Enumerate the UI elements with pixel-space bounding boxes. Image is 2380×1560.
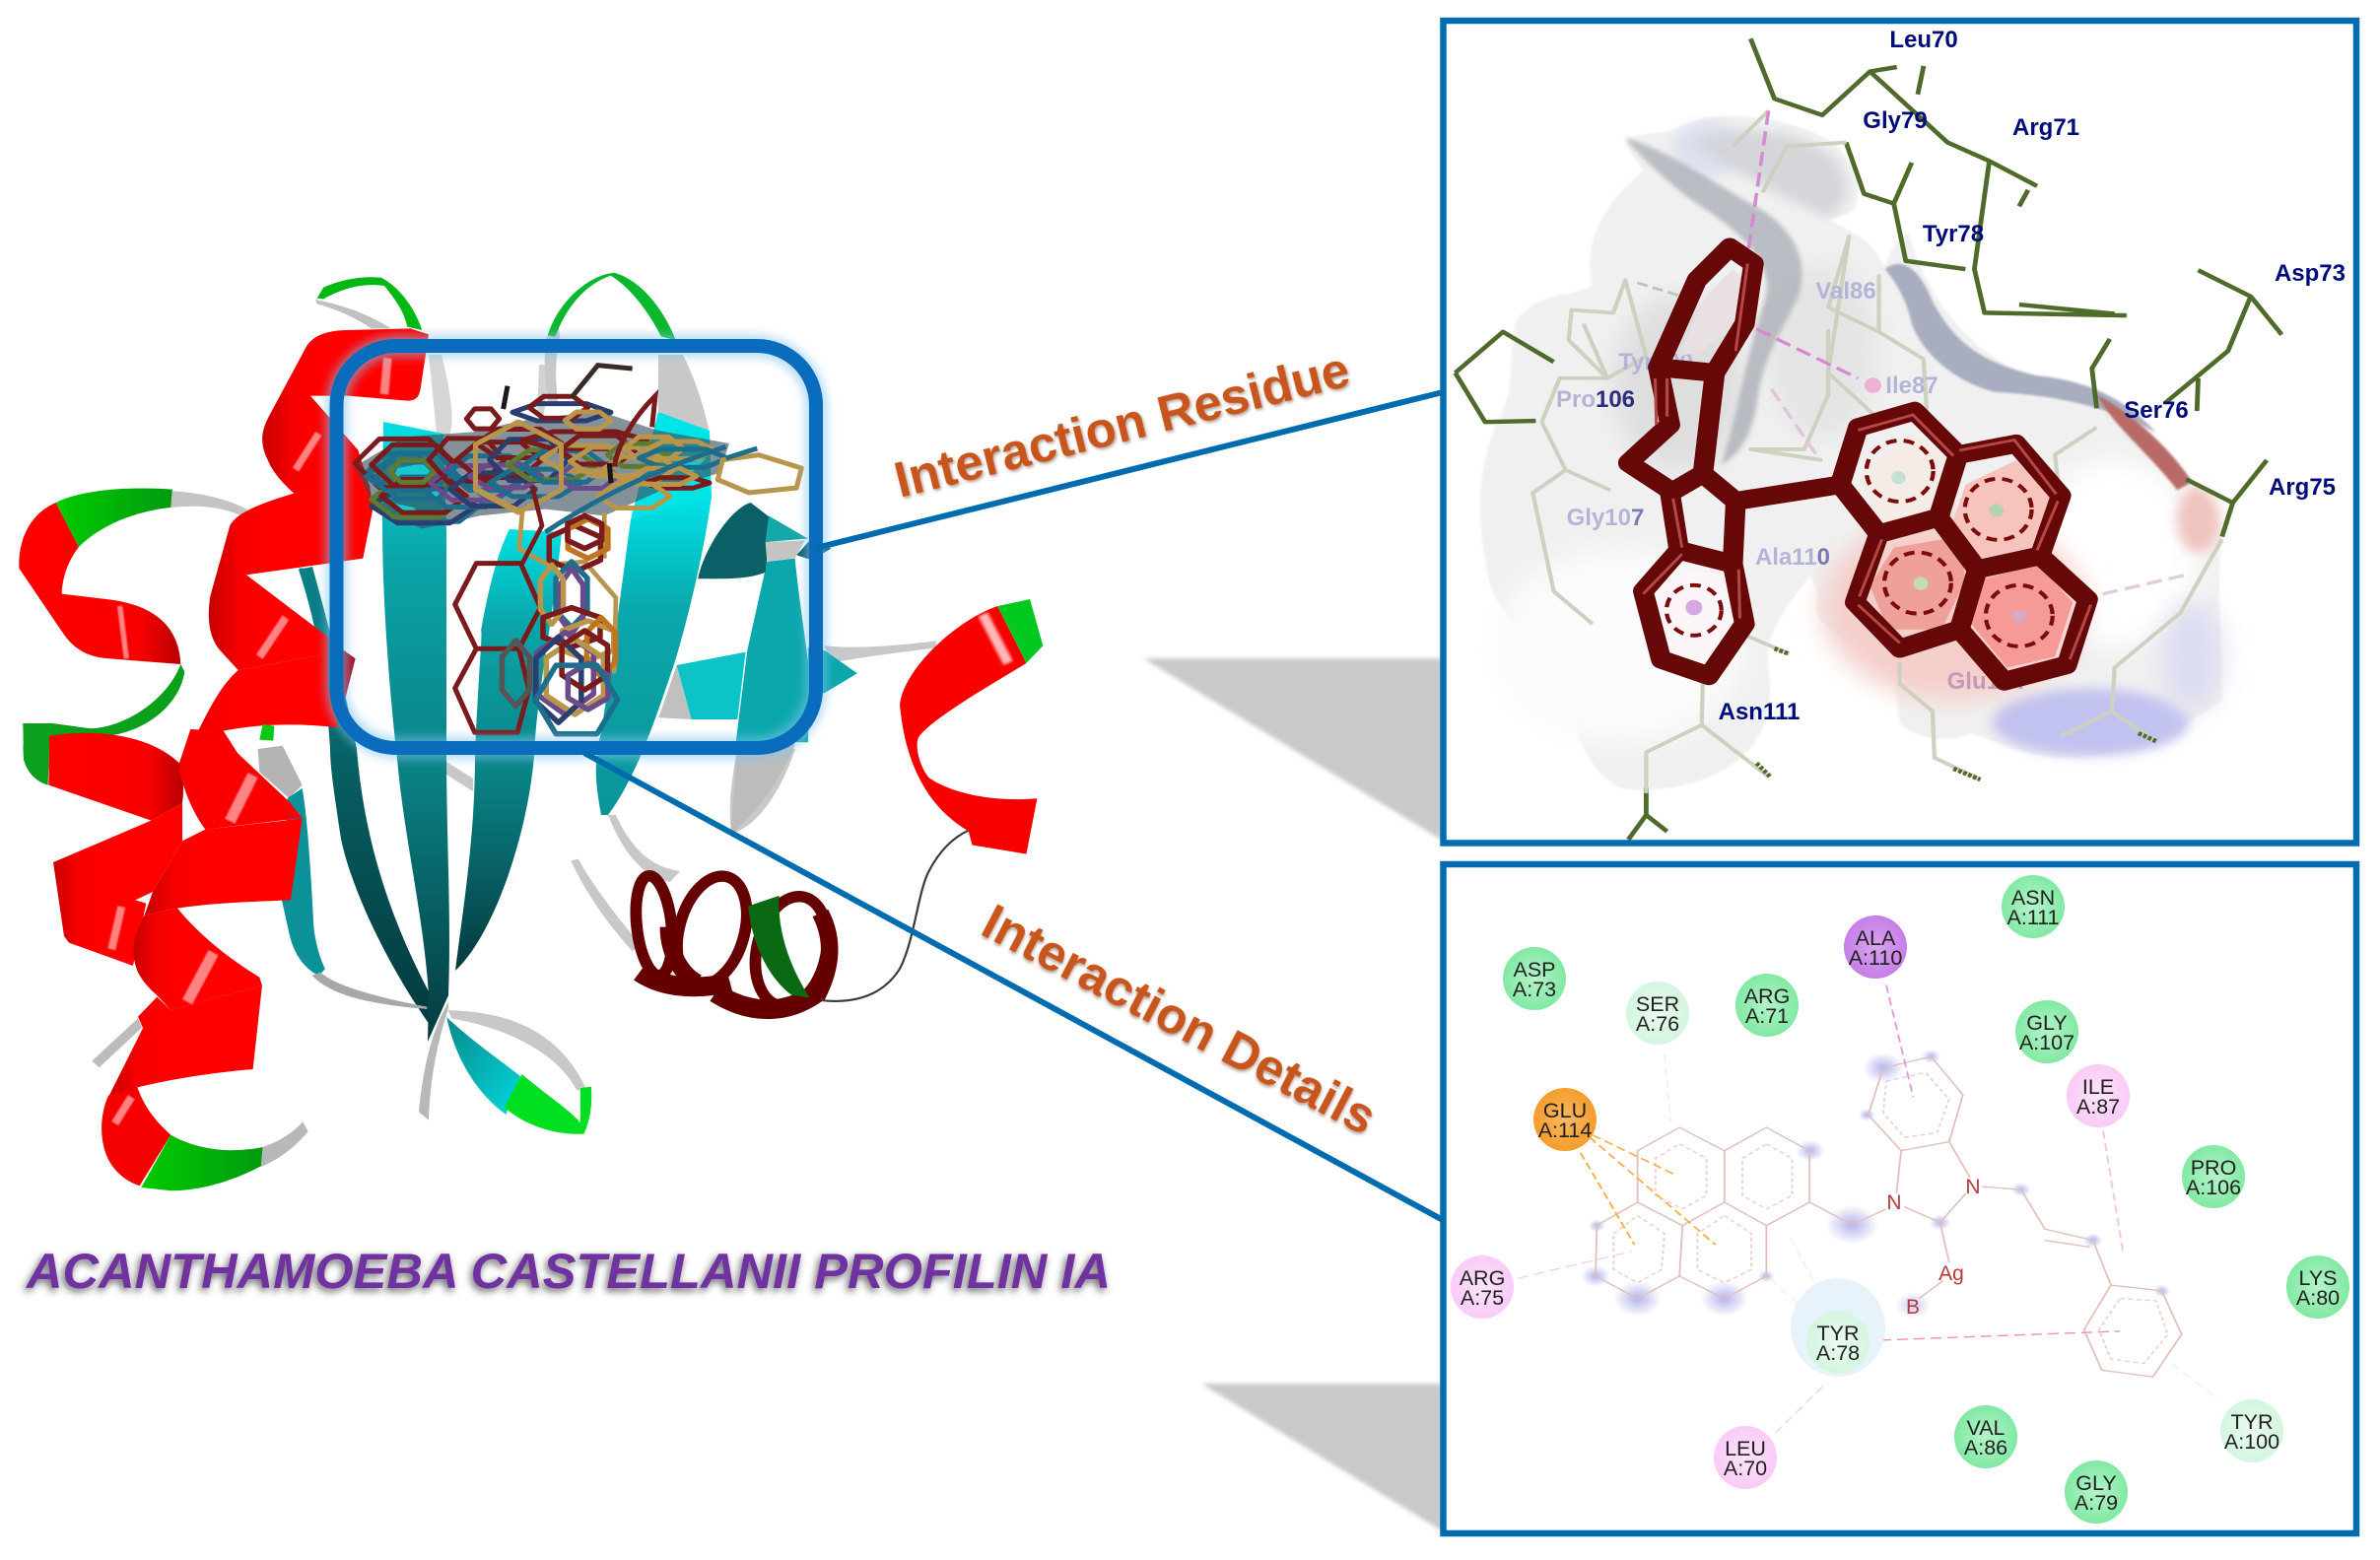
TYR A:100: A:100 bbox=[2224, 1430, 2279, 1454]
ARG A:71 bbox=[1735, 974, 1799, 1037]
residue nodes bbox=[1451, 875, 2349, 1524]
solvent accessibility halos on atoms bbox=[1581, 1050, 2170, 1319]
LEU A:70: LEU bbox=[1725, 1437, 1766, 1460]
faded residue labels under ligand: Ala110 bbox=[1755, 544, 1830, 571]
helix B second band bbox=[209, 485, 373, 670]
loop and coil details from lower part bbox=[446, 273, 1043, 1134]
ligand: aromatic dashed rings bbox=[1666, 441, 2053, 646]
cyan fold highlight bbox=[766, 515, 808, 542]
ARG A:75: A:75 bbox=[1461, 1286, 1504, 1310]
ALA A:110: ALA bbox=[1856, 926, 1896, 950]
top turn: green right bbox=[548, 273, 676, 340]
residue labels: Arg75 bbox=[2269, 474, 2336, 501]
helix A lower band bbox=[48, 733, 183, 821]
ligand: stick highlights bbox=[1643, 264, 2090, 659]
residue stick tips bbox=[1756, 648, 2156, 780]
ligand underlay: dense overlap of poses bbox=[355, 411, 729, 529]
helix B wide band bbox=[145, 819, 303, 915]
grey centre strand bbox=[419, 1002, 448, 1120]
faded residue labels under ligand bbox=[1556, 278, 2025, 695]
surface: lighter patches bbox=[1494, 548, 1744, 744]
atom labels: N bbox=[1886, 1191, 1902, 1214]
helix B diagonal bbox=[179, 729, 303, 830]
grey coils bbox=[448, 315, 936, 1090]
bottom hairpin turn bbox=[446, 1017, 520, 1115]
TYR A:78: TYR bbox=[1817, 1322, 1859, 1345]
LYS A:80 bbox=[2286, 1255, 2349, 1319]
hairpin green bbox=[505, 1074, 591, 1134]
highlight box around binding site bbox=[337, 346, 816, 748]
ligand flecks: cyan showing through bbox=[391, 458, 707, 515]
GLU A:114: A:114 bbox=[1538, 1119, 1592, 1142]
GLY A:79 bbox=[2065, 1460, 2128, 1524]
connector line to interaction residue panel bbox=[816, 392, 1443, 548]
faded residue labels under ligand: Pro106 bbox=[1556, 386, 1635, 413]
ILE A:87 bbox=[2067, 1064, 2130, 1127]
surface: blue grey ridge bbox=[1885, 264, 2156, 433]
highlight box glow bbox=[337, 346, 816, 748]
ligand layer: horizontal poses bbox=[355, 366, 801, 673]
GLU A:114: GLU bbox=[1543, 1099, 1587, 1122]
ASN A:111 bbox=[2002, 875, 2065, 938]
interaction lines: pi-anion bbox=[1581, 1135, 1716, 1245]
atom labels: Ag bbox=[1938, 1262, 1964, 1285]
PRO A:106 bbox=[2182, 1145, 2245, 1208]
beta strand 3 bbox=[455, 529, 562, 971]
ligand: ring centroids bbox=[1685, 471, 2026, 622]
shadow wedge: upper panel bbox=[1143, 658, 1443, 841]
ligand bonds bbox=[1596, 1056, 2182, 1377]
ASP A:73: A:73 bbox=[1513, 978, 1556, 1001]
ASP A:73: ASP bbox=[1513, 958, 1556, 982]
surface: dark red ridge bbox=[2097, 394, 2192, 490]
surface: upper shading bbox=[1691, 131, 1846, 217]
small teal strand behind helix bbox=[299, 569, 330, 667]
highlights bbox=[111, 776, 253, 1123]
faded residue labels under ligand: Gly107 bbox=[1567, 505, 1644, 531]
residue labels: Arg71 bbox=[2012, 114, 2079, 141]
molecular surface and residues bbox=[1456, 38, 2281, 840]
left teal strand bbox=[282, 788, 325, 976]
interaction dash green bbox=[1637, 283, 1691, 300]
VAL A:86: VAL bbox=[1966, 1416, 2006, 1440]
grey loops behind sheet bbox=[429, 355, 795, 882]
grey under fold bbox=[658, 665, 692, 719]
TYR A:78 bbox=[1806, 1311, 1870, 1374]
turn: grey bbox=[315, 300, 391, 328]
residue labels: Ser76 bbox=[2124, 397, 2189, 424]
GLY A:107 bbox=[2015, 1000, 2078, 1063]
ILE A:87: ILE bbox=[2082, 1075, 2114, 1099]
ligand bbox=[1628, 247, 2090, 681]
helix B lower band bbox=[108, 985, 262, 1097]
residue labels: Gly79 bbox=[1863, 107, 1928, 134]
helix and left strands: upper crop bbox=[19, 277, 429, 772]
helix end grey bbox=[261, 1121, 308, 1167]
connector line to interaction details panel bbox=[584, 753, 1443, 1220]
highlights bbox=[106, 358, 387, 749]
2D ligand diagram bbox=[1518, 985, 2218, 1433]
atom labels bbox=[1886, 1176, 1981, 1319]
heading: interaction details: Interaction Details bbox=[974, 893, 1386, 1145]
faded residue labels under ligand: Ile87 bbox=[1885, 373, 1938, 399]
LEU A:70 bbox=[1714, 1426, 1777, 1489]
ILE A:87: A:87 bbox=[2076, 1095, 2120, 1119]
ALA A:110: A:110 bbox=[1849, 946, 1902, 970]
helix B third band bbox=[180, 653, 338, 772]
LYS A:80: A:80 bbox=[2296, 1286, 2340, 1310]
faded residue labels under ligand: Val86 bbox=[1815, 278, 1876, 305]
teal cross band bbox=[677, 652, 746, 719]
beta strand 1 bbox=[299, 567, 430, 1025]
panel: 2D interaction diagram bbox=[1443, 864, 2356, 1533]
residue sticks: solid bbox=[1456, 38, 2281, 840]
helix A green bbox=[56, 488, 172, 547]
beta sheet: cyan back bbox=[631, 412, 712, 519]
ASN A:111: A:111 bbox=[2006, 906, 2060, 929]
helix A green block lower bbox=[23, 746, 49, 785]
helix A upper red bbox=[19, 503, 180, 664]
interaction lines bbox=[1518, 985, 2218, 1433]
helix A grey bbox=[170, 491, 249, 515]
ligand: dark red sticks bbox=[1628, 247, 2087, 681]
residue labels bbox=[1719, 27, 2346, 725]
helix A green linker bbox=[23, 664, 184, 769]
grey lead to left strand bbox=[258, 746, 303, 798]
panel background bbox=[1447, 867, 2353, 1530]
residue sticks: faded inside surface bbox=[1532, 110, 2222, 793]
GLY A:79: GLY bbox=[2075, 1471, 2117, 1495]
VAL A:86: A:86 bbox=[1964, 1436, 2007, 1459]
helix B dark edge bbox=[338, 648, 356, 700]
ligand layer: vertical poses bbox=[455, 515, 618, 734]
surface: negative red patch bbox=[1822, 514, 2084, 701]
ARG A:75: ARG bbox=[1460, 1266, 1505, 1290]
dark fold bbox=[698, 503, 772, 578]
interaction sphere bbox=[1865, 377, 1881, 393]
ligand aromatic inner rings bbox=[1613, 1072, 2168, 1364]
heading: interaction residue: Interaction Residue bbox=[889, 341, 1355, 509]
helix end green bbox=[141, 1135, 263, 1190]
ligand: aromatic ring fills bbox=[1655, 269, 2073, 667]
helix B top red bbox=[262, 328, 429, 494]
GLU A:114 bbox=[1533, 1088, 1597, 1151]
residue labels: Leu70 bbox=[1889, 27, 1958, 53]
shadow wedge: lower panel bbox=[1201, 1384, 1443, 1531]
ARG A:71: A:71 bbox=[1745, 1004, 1789, 1028]
grey fold highlight bbox=[766, 540, 805, 562]
right helix bbox=[900, 599, 1043, 854]
LYS A:80: LYS bbox=[2298, 1266, 2338, 1290]
ASN A:111: ASN bbox=[2011, 886, 2055, 910]
SER A:76: A:76 bbox=[1636, 1012, 1679, 1036]
grey under ribbon bbox=[731, 744, 795, 835]
panel border bbox=[1443, 864, 2356, 1533]
GLY A:107: A:107 bbox=[2019, 1031, 2074, 1054]
faded residue labels under ligand: Tyr100 bbox=[1618, 349, 1693, 375]
interaction dashes bbox=[1747, 110, 2186, 594]
ASP A:73 bbox=[1503, 947, 1566, 1010]
panel: 3D interaction residue bbox=[1443, 21, 2356, 844]
atom labels: N bbox=[1965, 1176, 1981, 1198]
dark tip bbox=[796, 539, 831, 560]
beta strand 2 bbox=[382, 422, 449, 1042]
helix and left strands: lower crop bbox=[23, 729, 448, 1190]
residue halo: TYR A:78 bbox=[1791, 1278, 1885, 1377]
SER A:76 bbox=[1626, 982, 1689, 1045]
residue labels: Tyr78 bbox=[1923, 221, 1984, 247]
protein ribbon structure bbox=[19, 273, 1043, 1190]
superimposed ligand poses bbox=[355, 366, 801, 734]
solvent surface bbox=[1480, 116, 2222, 789]
residue labels: Asn111 bbox=[1719, 699, 1800, 725]
TYR A:100: TYR bbox=[2231, 1410, 2273, 1434]
thin dark coil to right helix bbox=[806, 830, 970, 1001]
TYR A:100 bbox=[2220, 1399, 2283, 1462]
title: ACANTHAMOEBA CASTELLANII PROFILIN IA bbox=[25, 1244, 1111, 1299]
helix B diagonal lower bbox=[133, 909, 262, 1010]
PRO A:106: PRO bbox=[2191, 1156, 2236, 1180]
beta sheet right fold (crop coordinates) bbox=[658, 503, 857, 835]
dark helix green turn bbox=[748, 896, 809, 997]
ARG A:71: ARG bbox=[1744, 984, 1790, 1008]
ARG A:75 bbox=[1451, 1255, 1514, 1319]
panel background bbox=[1447, 24, 2353, 840]
ALA A:110 bbox=[1844, 916, 1907, 979]
helix start grey bbox=[92, 1018, 142, 1067]
residue labels: Asp73 bbox=[2275, 260, 2346, 287]
TYR A:78: A:78 bbox=[1816, 1341, 1860, 1365]
helix B end bbox=[102, 1087, 170, 1186]
LEU A:70: A:70 bbox=[1724, 1457, 1767, 1480]
beta strand 4 bbox=[596, 496, 712, 815]
dark helix bbox=[632, 868, 838, 1012]
GLY A:107: GLY bbox=[2026, 1011, 2068, 1035]
surface: dark cavity fold bbox=[1625, 138, 1802, 466]
panel border bbox=[1443, 21, 2356, 844]
teal tip right of box bbox=[808, 647, 857, 693]
turn: green bbox=[317, 277, 422, 330]
grey loop to hairpin bbox=[312, 973, 427, 1009]
teal vertical ribbon bbox=[736, 559, 810, 742]
atom labels: B bbox=[1906, 1296, 1920, 1319]
VAL A:86 bbox=[1954, 1405, 2017, 1468]
faded residue labels under ligand: Glu114 bbox=[1947, 668, 2025, 695]
PRO A:106: A:106 bbox=[2186, 1176, 2241, 1199]
helix A bottom wrap bbox=[53, 803, 182, 966]
GLY A:79: A:79 bbox=[2074, 1491, 2118, 1515]
SER A:76: SER bbox=[1636, 992, 1679, 1016]
green stub bbox=[259, 724, 274, 741]
surface: positive blue patch bbox=[1993, 689, 2189, 756]
